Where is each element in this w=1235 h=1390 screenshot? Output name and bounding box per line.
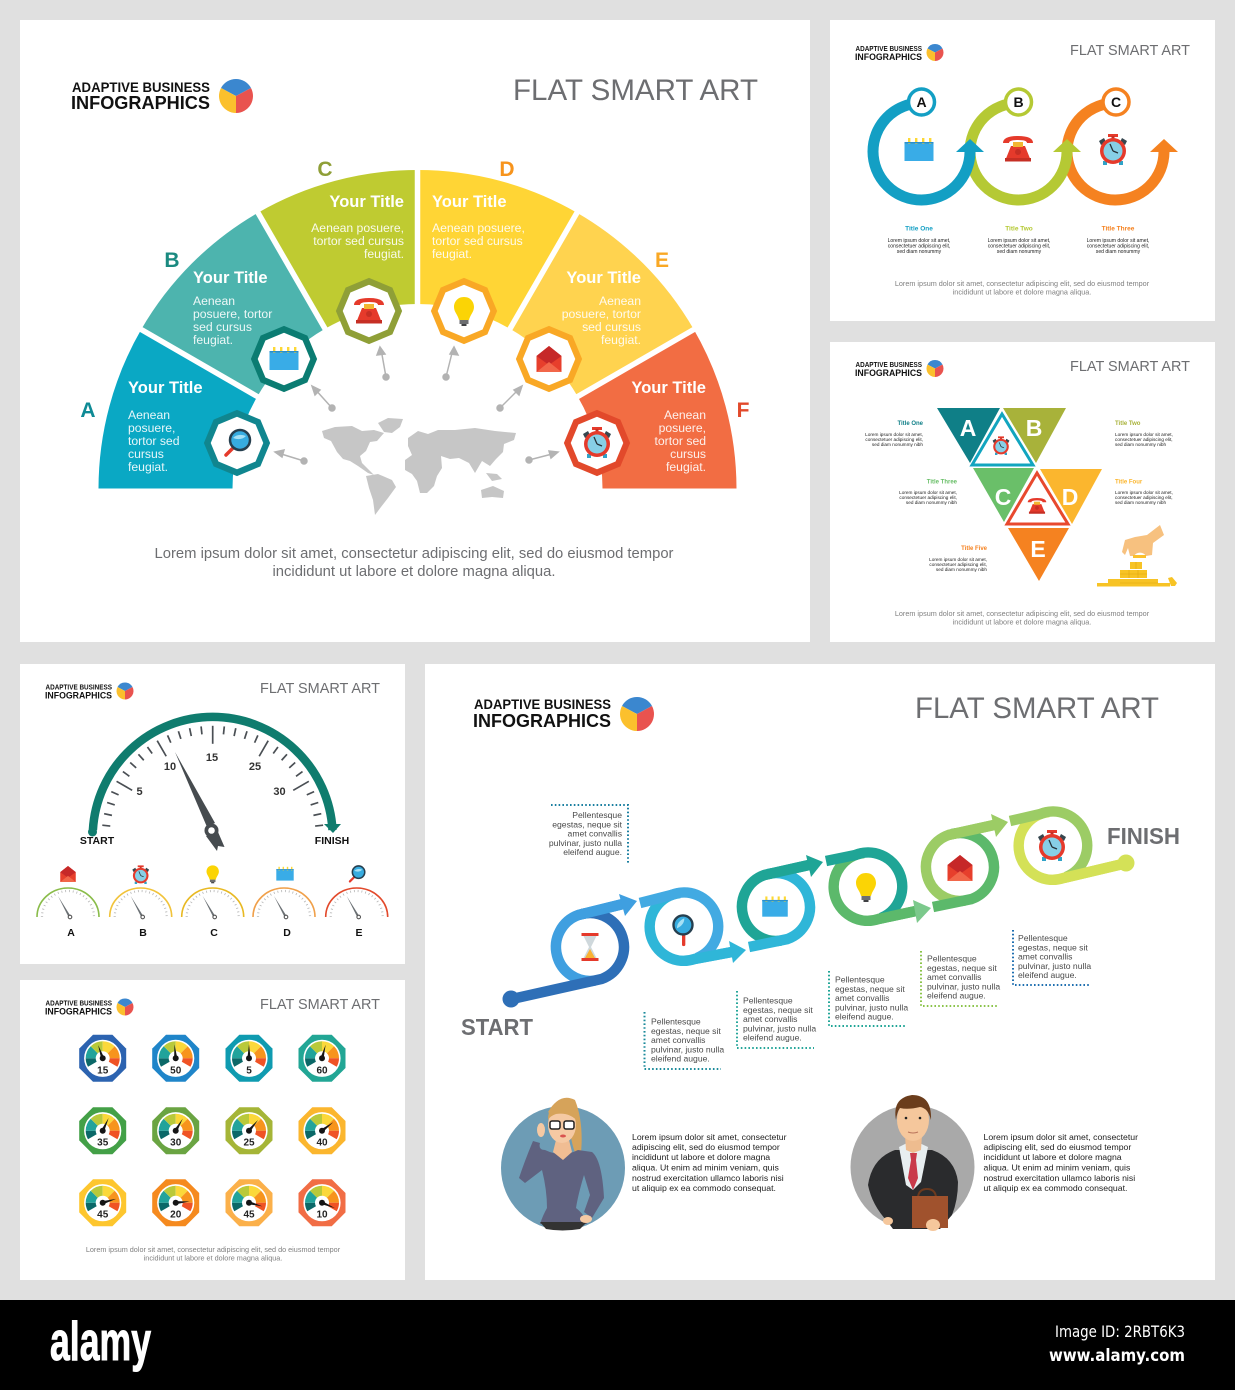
side text: title two: Lorem ipsum dolor sit amet,	[1115, 432, 1173, 437]
dial 50	[152, 1035, 199, 1082]
note 2: amet convallis	[651, 1035, 705, 1045]
side text: title two: consectetuer adipiscing elit,	[1115, 437, 1173, 442]
mini gauge D: D	[283, 927, 291, 939]
segment text D	[432, 193, 525, 261]
logo: main slide	[71, 79, 253, 113]
triangle D	[1040, 469, 1102, 524]
note 5	[921, 951, 1000, 1006]
logo: main slide: INFOGRAPHICS	[71, 93, 210, 113]
label: start: START	[80, 835, 115, 847]
note 6: pulvinar, justo nulla	[1018, 961, 1091, 971]
dial 35	[79, 1107, 126, 1154]
triangle C: C	[995, 484, 1011, 510]
side text: title four: consectetuer adipiscing elit,	[1115, 495, 1173, 500]
dial 60: 60	[316, 1065, 328, 1076]
segment text B: sed cursus	[193, 320, 252, 334]
note 4: egestas, neque sit	[835, 984, 905, 994]
side text: title four: Title Four	[1115, 480, 1143, 486]
label: start: START	[461, 1014, 533, 1040]
logo: ADAPTIVE BUSINESS	[46, 684, 112, 692]
note 1	[549, 805, 628, 863]
dial 15: 15	[97, 1065, 109, 1076]
segment letters: D	[499, 158, 515, 181]
segment text F: Your Title	[631, 379, 706, 397]
caption: Lorem ipsum dolor sit amet, consectetur adipiscing elit, sed do eiusmod tempor	[895, 279, 1150, 288]
footer image id: Image ID: 2RBT6K3	[1055, 1322, 1185, 1341]
column text: title three	[1087, 226, 1149, 255]
segment text E: feugiat.	[601, 333, 641, 347]
side text: title five: consectetuer adipiscing elit,	[929, 562, 987, 567]
heading: FLAT SMART ART	[260, 681, 380, 697]
column text: title two: sed diam nonummy	[997, 249, 1042, 255]
segment text E	[562, 269, 641, 347]
looping path chart	[502, 811, 1134, 1008]
note 1: amet convallis	[568, 828, 622, 838]
column text: title three: Title Three	[1102, 226, 1135, 232]
side text: title five: Lorem ipsum dolor sit amet,	[929, 557, 987, 562]
segment text A: Your Title	[128, 379, 203, 397]
text: man description: nostrud exercitation ullamco laboris nisi	[984, 1173, 1135, 1183]
triangle A: A	[960, 415, 976, 441]
side text: title one: Title One	[897, 421, 924, 427]
note 6: Pellentesque	[1018, 933, 1068, 943]
note 1: pulvinar, justo nulla	[549, 838, 622, 848]
segment text A: posuere,	[128, 421, 175, 435]
triangle B: B	[1026, 415, 1042, 441]
logo: ADAPTIVE BUSINESS	[474, 696, 611, 712]
dial 45 second	[226, 1179, 272, 1226]
triangle E	[1008, 528, 1069, 581]
column text: title two	[988, 226, 1050, 255]
mini gauge C: C	[210, 927, 218, 939]
column text: title one: Lorem ipsum dolor sit amet,	[888, 238, 950, 244]
dial 35: 35	[97, 1138, 109, 1149]
note 3	[737, 991, 816, 1048]
dial 45: 45	[97, 1210, 109, 1221]
note 2: Pellentesque	[651, 1016, 701, 1026]
footer logo: alamy	[50, 1310, 151, 1372]
arrow ring B: B	[1013, 94, 1024, 110]
side text: title three: sed diam nonummy nibh	[906, 500, 957, 505]
icon: telephone	[1003, 136, 1033, 162]
caption: Lorem ipsum dolor sit amet, consectetur adipiscing elit, sed do eiusmod tempor	[155, 546, 674, 562]
dial 20	[152, 1179, 199, 1226]
note 2: eleifend augue.	[651, 1054, 710, 1064]
side text: title five: sed diam nonummy nibh	[936, 567, 987, 572]
note 4: pulvinar, justo nulla	[835, 1002, 908, 1012]
text: man description: adipiscing elit, sed do eiusmod tempor	[984, 1142, 1131, 1152]
segment text C: feugiat.	[364, 247, 404, 261]
segment text F: posuere,	[659, 421, 706, 435]
triangle D: D	[1062, 484, 1078, 510]
segment text E: Your Title	[566, 269, 641, 287]
segment text F: feugiat.	[666, 460, 706, 474]
speedometer ticks	[102, 726, 323, 826]
mini gauge A: A	[67, 927, 75, 939]
panel: semicircle fan slide	[20, 20, 810, 642]
heading: FLAT SMART ART	[1070, 43, 1190, 59]
text: woman description: incididunt ut labore et dolore magna	[632, 1152, 770, 1162]
text: man description: aliqua. Ut enim ad minim veniam, quis	[984, 1162, 1131, 1172]
note 5: pulvinar, justo nulla	[927, 982, 1000, 992]
dial 45	[79, 1179, 126, 1226]
side text: title one: consectetuer adipiscing elit,	[865, 437, 923, 442]
note 6: amet convallis	[1018, 952, 1072, 962]
text: man description: ut aliquip ex ea commodo consequat.	[984, 1183, 1127, 1193]
arrows from map to badges	[275, 347, 558, 464]
side text: title one: sed diam nonummy nibh	[872, 442, 923, 447]
panel: dial grid slide	[20, 980, 405, 1280]
text: man description: Lorem ipsum dolor sit amet, consectetur	[984, 1132, 1138, 1142]
segment text B	[193, 269, 272, 347]
column text: title three: sed diam nonummy	[1096, 249, 1141, 255]
note 3: amet convallis	[743, 1014, 797, 1024]
icon badge: envelope	[519, 329, 579, 389]
dial 5: 5	[246, 1065, 252, 1076]
logo: main slide: ADAPTIVE BUSINESS	[72, 79, 210, 95]
icon: hourglass	[582, 933, 598, 961]
segment text B: posuere, tortor	[193, 307, 272, 321]
icon badge: light bulb	[434, 281, 494, 341]
column text: title two: Lorem ipsum dolor sit amet,	[988, 238, 1050, 244]
note 6: eleifend augue.	[1018, 970, 1077, 980]
text: woman description: Lorem ipsum dolor sit amet, consectetur	[632, 1132, 787, 1142]
mini gauge D	[253, 867, 315, 939]
segment text F: Aenean	[664, 408, 706, 422]
segment text D: feugiat.	[432, 247, 472, 261]
arrow ring C	[1067, 89, 1178, 200]
dial 60	[298, 1035, 346, 1082]
side text: title four: Lorem ipsum dolor sit amet,	[1115, 490, 1173, 495]
caption: incididunt ut labore et dolore magna aliqua.	[144, 1254, 282, 1262]
dial 5	[226, 1035, 272, 1082]
text: man description: incididunt ut labore et dolore magna	[984, 1152, 1122, 1162]
panel: triangles slide	[830, 342, 1215, 642]
triangle A	[937, 408, 1000, 463]
side text: title one	[865, 421, 924, 447]
arrow ring A	[873, 89, 984, 200]
speedometer numbers: 10	[164, 761, 176, 773]
segment text C: tortor sed cursus	[313, 234, 404, 248]
column text: title one: Title One	[905, 226, 933, 232]
mini gauge A	[37, 866, 99, 939]
note 5: eleifend augue.	[927, 990, 986, 1000]
segment text C: Your Title	[329, 193, 404, 211]
note 6: egestas, neque sit	[1018, 942, 1088, 952]
logo	[473, 696, 654, 731]
dial 10	[298, 1179, 346, 1226]
column text: title one: sed diam nonummy	[897, 249, 942, 255]
person: businesswoman	[501, 1098, 625, 1230]
ring 6	[1010, 811, 1134, 880]
column text: title one: consectetuer adipiscing elit,	[888, 244, 950, 250]
segment letters: E	[655, 249, 669, 272]
text: woman description: adipiscing elit, sed do eiusmod tempor	[632, 1142, 780, 1152]
segment text D: Aenean posuere,	[432, 221, 525, 235]
segment text A: cursus	[128, 447, 164, 461]
logo: INFOGRAPHICS	[45, 690, 112, 700]
footer bar	[0, 1300, 1235, 1390]
triangle E: E	[1030, 536, 1046, 562]
dial 45 second: 45	[243, 1210, 255, 1221]
dial 30: 30	[170, 1138, 182, 1149]
footer url: www.alamy.com	[1049, 1346, 1185, 1366]
person: businessman	[850, 1095, 974, 1231]
speedometer numbers: 30	[273, 786, 286, 798]
note 1: eleifend augue.	[563, 847, 622, 857]
icon badge: telephone	[339, 281, 399, 341]
note 1: Pellentesque	[572, 810, 622, 820]
heading: FLAT SMART ART	[260, 997, 380, 1013]
logo: ADAPTIVE BUSINESS	[856, 362, 922, 369]
column text: title three: Lorem ipsum dolor sit amet,	[1087, 238, 1149, 244]
logo: ADAPTIVE BUSINESS	[46, 1000, 112, 1008]
side text: title two: Title Two	[1115, 421, 1141, 427]
segment text E: posuere, tortor	[562, 307, 641, 321]
panel: speedometer slide	[20, 664, 405, 964]
segment text E: Aenean	[599, 294, 641, 308]
segment text F: cursus	[670, 447, 706, 461]
note 2: pulvinar, justo nulla	[651, 1044, 724, 1054]
ring 3	[742, 855, 823, 947]
note 5: egestas, neque sit	[927, 963, 997, 973]
dial 20: 20	[170, 1210, 182, 1221]
side text: title five: Title Five	[961, 546, 988, 552]
speedometer numbers: 5	[136, 786, 143, 798]
text: woman description: aliqua. Ut enim ad minim veniam, quis	[632, 1162, 779, 1172]
segment text E: sed cursus	[582, 320, 641, 334]
caption: incididunt ut labore et dolore magna aliqua.	[953, 288, 1091, 296]
dial 25	[226, 1107, 272, 1154]
caption: incididunt ut labore et dolore magna aliqua.	[953, 618, 1091, 626]
segment text B: Your Title	[193, 269, 268, 287]
mini gauge B	[110, 865, 172, 939]
note 1: egestas, neque sit	[552, 820, 623, 830]
side text: title five	[929, 546, 988, 572]
world map	[322, 418, 516, 515]
icon: envelope	[948, 855, 972, 881]
segment text A: feugiat.	[128, 460, 168, 474]
label: finish: FINISH	[1107, 823, 1180, 849]
mini gauge B: B	[139, 927, 147, 939]
speedometer numbers: 15	[206, 752, 218, 764]
segment text F	[631, 379, 706, 474]
segment text C: Aenean posuere,	[311, 221, 404, 235]
note 3: Pellentesque	[743, 996, 793, 1006]
ring 1	[502, 894, 637, 1008]
note 4: eleifend augue.	[835, 1012, 894, 1022]
mini gauge E: E	[355, 927, 363, 939]
logo: INFOGRAPHICS	[473, 711, 611, 731]
icon badge: magnifier	[207, 413, 267, 473]
icon badge: calendar	[254, 329, 314, 389]
heading: FLAT SMART ART	[915, 692, 1159, 725]
ring 4	[826, 852, 931, 923]
column text: title one	[888, 226, 950, 255]
icon: magnifier	[667, 912, 700, 944]
side text: title one: Lorem ipsum dolor sit amet,	[865, 432, 923, 437]
icon: calendar	[762, 896, 788, 917]
triangle outline with telephone	[1007, 473, 1068, 524]
triangle outline with clock	[972, 414, 1033, 465]
segment text A	[128, 379, 203, 474]
heading: FLAT SMART ART	[1070, 359, 1190, 375]
segment letters: C	[317, 158, 333, 181]
ring 2	[640, 893, 746, 963]
speedometer needle	[175, 752, 224, 851]
side text: title three: consectetuer adipiscing elit,	[899, 495, 957, 500]
note 5: amet convallis	[927, 972, 981, 982]
icon: calendar	[904, 138, 934, 161]
note 2	[644, 1012, 724, 1069]
text: woman description: ut aliquip ex ea commodo consequat.	[632, 1183, 776, 1193]
column text: title three: consectetuer adipiscing elit,	[1087, 244, 1149, 250]
logo: INFOGRAPHICS	[855, 52, 922, 62]
side text: title two: sed diam nonummy nibh	[1115, 442, 1166, 447]
side text: title four	[1115, 480, 1173, 505]
panel: start to finish path slide	[425, 664, 1215, 1280]
label: finish: FINISH	[315, 835, 349, 847]
note 3: eleifend augue.	[743, 1032, 802, 1042]
speedometer numbers	[136, 752, 286, 798]
side text: title three: Lorem ipsum dolor sit amet,	[899, 490, 957, 495]
segment text D: tortor sed cursus	[432, 234, 523, 248]
logo	[855, 44, 944, 62]
note 2: egestas, neque sit	[651, 1026, 721, 1036]
icon badge: alarm clock	[567, 413, 627, 473]
heading: flat smart art: FLAT SMART ART	[513, 74, 758, 107]
arrow ring C: C	[1111, 94, 1121, 110]
segment text A: tortor sed	[128, 434, 179, 448]
caption: Lorem ipsum dolor sit amet, consectetur adipiscing elit, sed do eiusmod tempor	[86, 1245, 341, 1254]
text: woman description: nostrud exercitation ullamco laboris nisi	[632, 1173, 784, 1183]
dial 40: 40	[316, 1138, 328, 1149]
segment text C	[311, 193, 404, 261]
speedometer numbers: 25	[249, 761, 261, 773]
column text: title two: Title Two	[1005, 226, 1033, 232]
icon: light bulb	[856, 873, 876, 902]
arrow ring A: A	[916, 94, 927, 110]
triangle C	[973, 468, 1034, 522]
chart: six segment semicircle	[98, 164, 736, 488]
icon: alarm clock	[1099, 134, 1127, 165]
dial 25: 25	[243, 1138, 255, 1149]
note 6	[1013, 930, 1091, 985]
segment text A: Aenean	[128, 408, 170, 422]
dial 15	[79, 1035, 126, 1082]
dial 30	[152, 1107, 199, 1154]
caption: Lorem ipsum dolor sit amet, consectetur adipiscing elit, sed do eiusmod tempor	[895, 609, 1150, 618]
logo	[855, 360, 944, 378]
arrow ring B	[970, 89, 1081, 200]
triangle B	[1003, 408, 1066, 463]
note 3: pulvinar, justo nulla	[743, 1024, 816, 1034]
logo: ADAPTIVE BUSINESS	[856, 46, 922, 53]
panel: circular arrows slide	[830, 20, 1215, 321]
segment text F: tortor sed	[655, 434, 706, 448]
side text: title four: sed diam nonummy nibh	[1115, 500, 1166, 505]
mini gauge C	[182, 865, 244, 939]
side text: title three: Title Three	[927, 480, 958, 486]
note 4: amet convallis	[835, 993, 889, 1003]
dial 10: 10	[316, 1210, 328, 1221]
segment text B: Aenean	[193, 294, 235, 308]
icon: hand placing coins	[1097, 525, 1177, 586]
caption: incididunt ut labore et dolore magna aliqua.	[273, 564, 555, 580]
segment text D: Your Title	[432, 193, 507, 211]
column text: title two: consectetuer adipiscing elit,	[988, 244, 1050, 250]
segment letters: F	[737, 399, 750, 422]
logo: INFOGRAPHICS	[45, 1006, 112, 1016]
side text: title three	[899, 480, 958, 505]
segment letters: A	[80, 399, 96, 422]
icon: alarm clock	[1038, 830, 1066, 861]
dial 40	[298, 1107, 346, 1154]
note 4: Pellentesque	[835, 974, 885, 984]
note 3: egestas, neque sit	[743, 1005, 813, 1015]
ring 5	[926, 814, 1008, 907]
side text: title two	[1115, 421, 1173, 447]
note 4	[829, 971, 908, 1026]
segment text B: feugiat.	[193, 333, 233, 347]
dial 50: 50	[170, 1065, 182, 1076]
speedometer arc	[88, 717, 341, 836]
note 5: Pellentesque	[927, 954, 977, 964]
logo: INFOGRAPHICS	[855, 368, 922, 378]
mini gauge E	[326, 866, 388, 939]
segment letters: B	[164, 249, 180, 272]
logo	[45, 682, 134, 700]
segment letters	[80, 158, 750, 422]
logo	[45, 998, 134, 1016]
